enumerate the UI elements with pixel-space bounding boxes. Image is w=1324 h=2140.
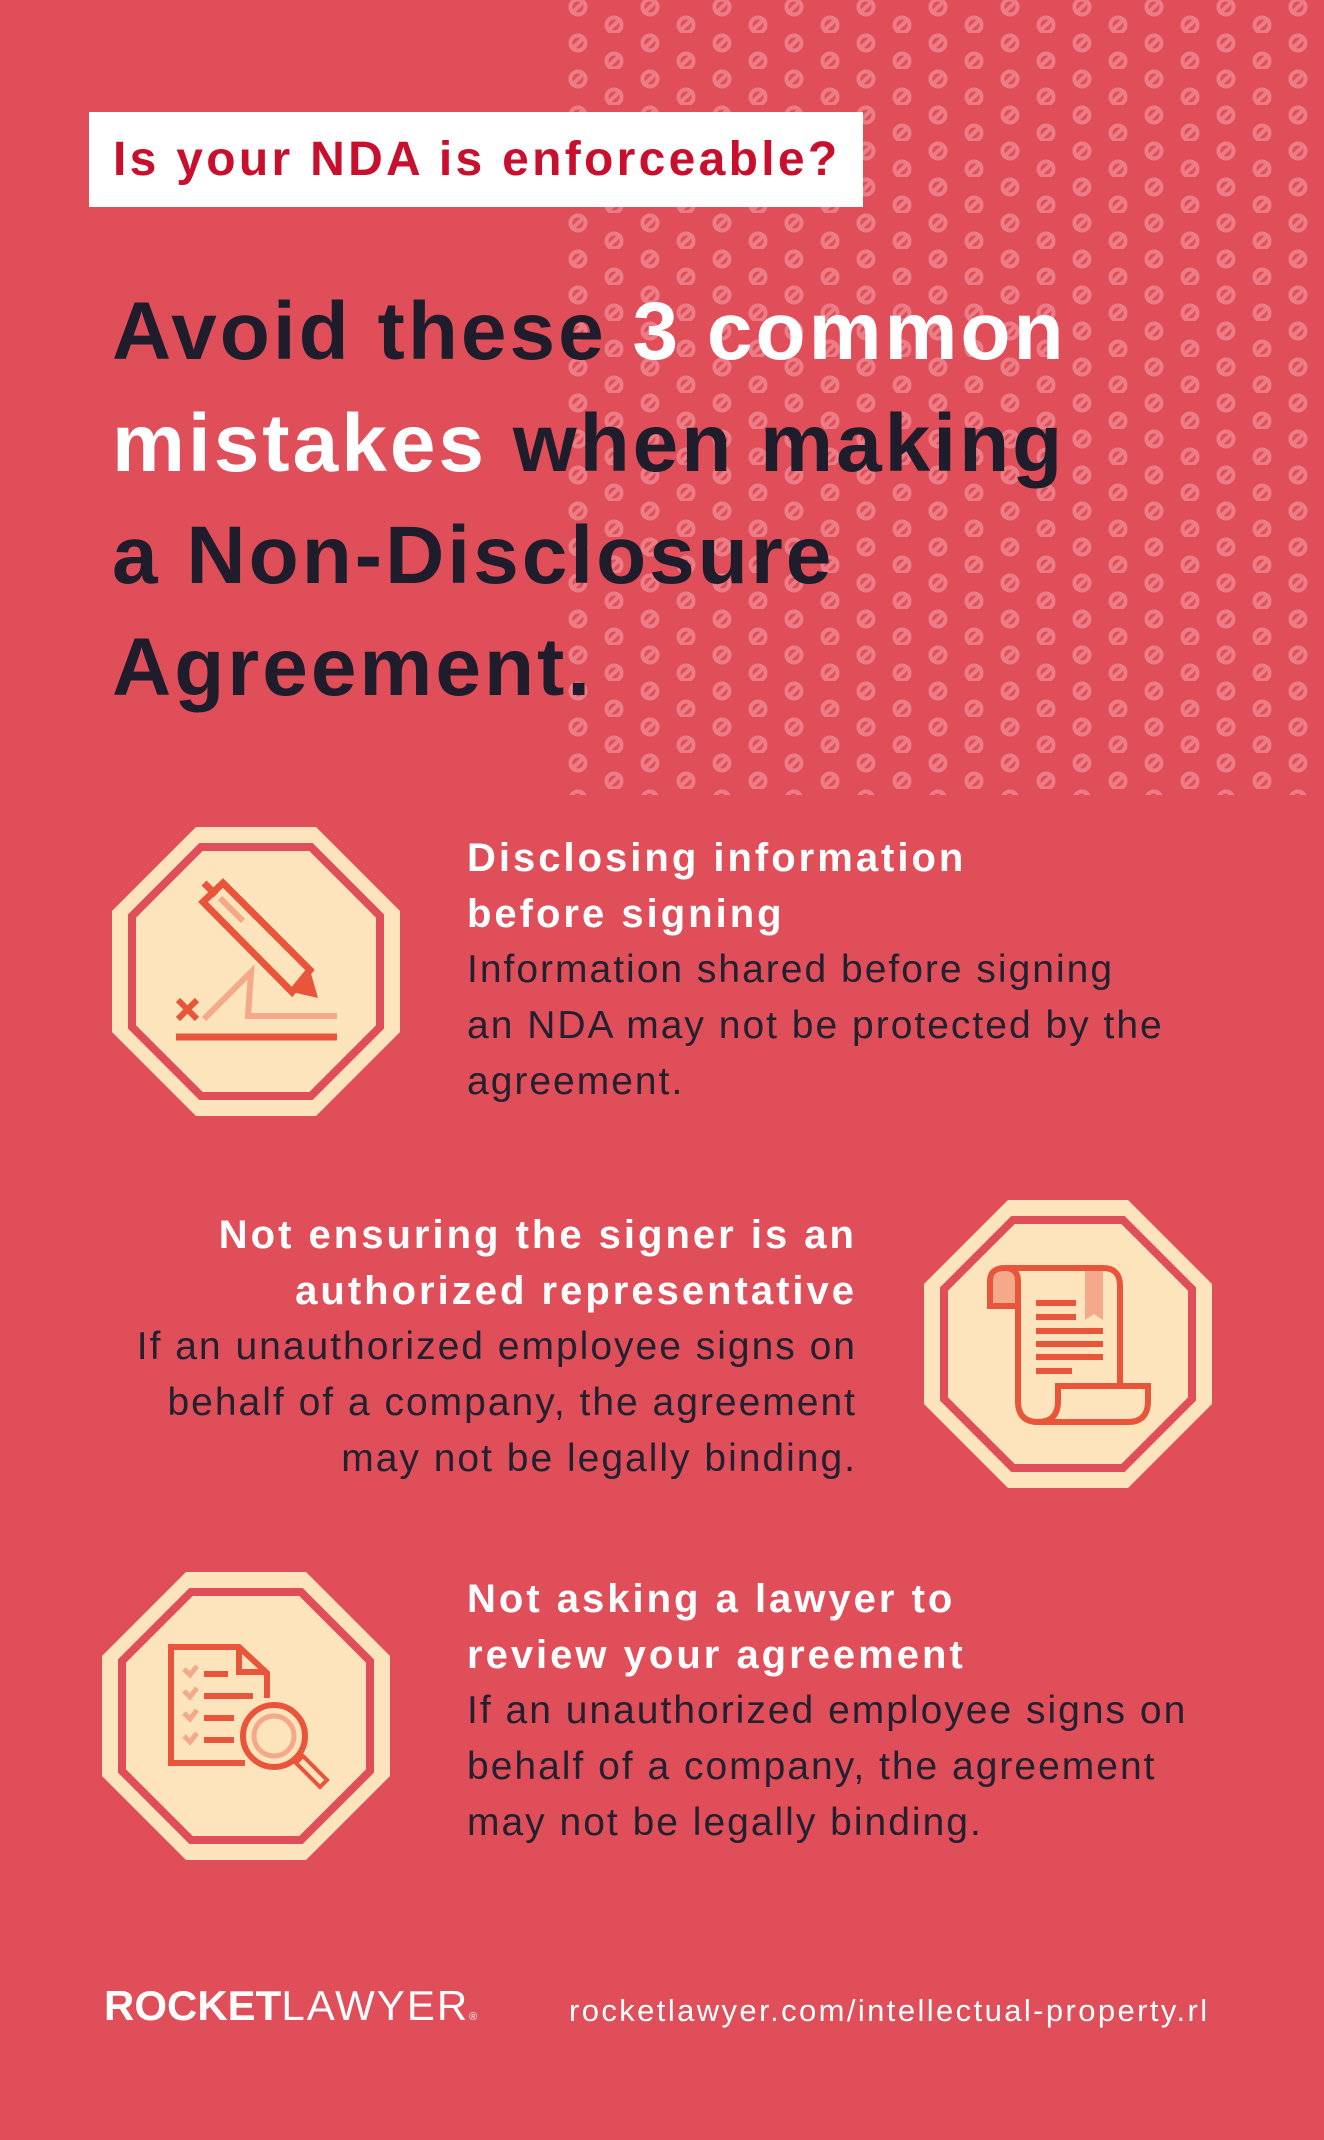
main heading: a Non-Disclosure bbox=[112, 510, 834, 601]
item 2 text: If an unauthorized employee signs on bbox=[137, 1325, 857, 1368]
main heading: Agreement. bbox=[112, 622, 593, 713]
footer logo: ROCKETLAWYER® bbox=[104, 1982, 477, 2029]
item 3 text: behalf of a company, the agreement bbox=[467, 1745, 1157, 1788]
item 1 text: an NDA may not be protected by the bbox=[467, 1004, 1164, 1047]
item 2 text: Not ensuring the signer is an bbox=[219, 1213, 857, 1257]
item 2 text: behalf of a company, the agreement bbox=[167, 1381, 857, 1424]
footer url: rocketlawyer.com/intellectual-property.rl bbox=[569, 1993, 1210, 2028]
item 1 text: Disclosing information bbox=[467, 836, 966, 880]
item 3 text: If an unauthorized employee signs on bbox=[467, 1689, 1187, 1732]
item 3 text: may not be legally binding. bbox=[467, 1801, 983, 1844]
icon: pen signing bbox=[112, 827, 400, 1116]
item 1 text: agreement. bbox=[467, 1060, 684, 1103]
item 3 text: review your agreement bbox=[467, 1633, 966, 1677]
main heading bbox=[112, 286, 1067, 713]
item 3 text: Not asking a lawyer to bbox=[467, 1577, 955, 1621]
item 2 text: authorized representative bbox=[295, 1269, 857, 1313]
icon: checklist with magnifier bbox=[102, 1572, 390, 1860]
icon: scroll document bbox=[924, 1200, 1212, 1488]
background dot pattern bbox=[568, 0, 1308, 795]
title box: Is your NDA is enforceable? bbox=[113, 133, 840, 186]
main heading: mistakes when making bbox=[112, 398, 1065, 489]
main heading: Avoid these 3 common bbox=[112, 286, 1067, 377]
item 1 text: before signing bbox=[467, 892, 785, 936]
item 3 text bbox=[467, 1577, 1187, 1844]
item 1 text bbox=[467, 836, 1164, 1103]
title box bbox=[89, 112, 863, 207]
item 2 text: may not be legally binding. bbox=[341, 1437, 857, 1480]
item 1 text: Information shared before signing bbox=[467, 948, 1114, 991]
item 2 text bbox=[137, 1213, 857, 1480]
